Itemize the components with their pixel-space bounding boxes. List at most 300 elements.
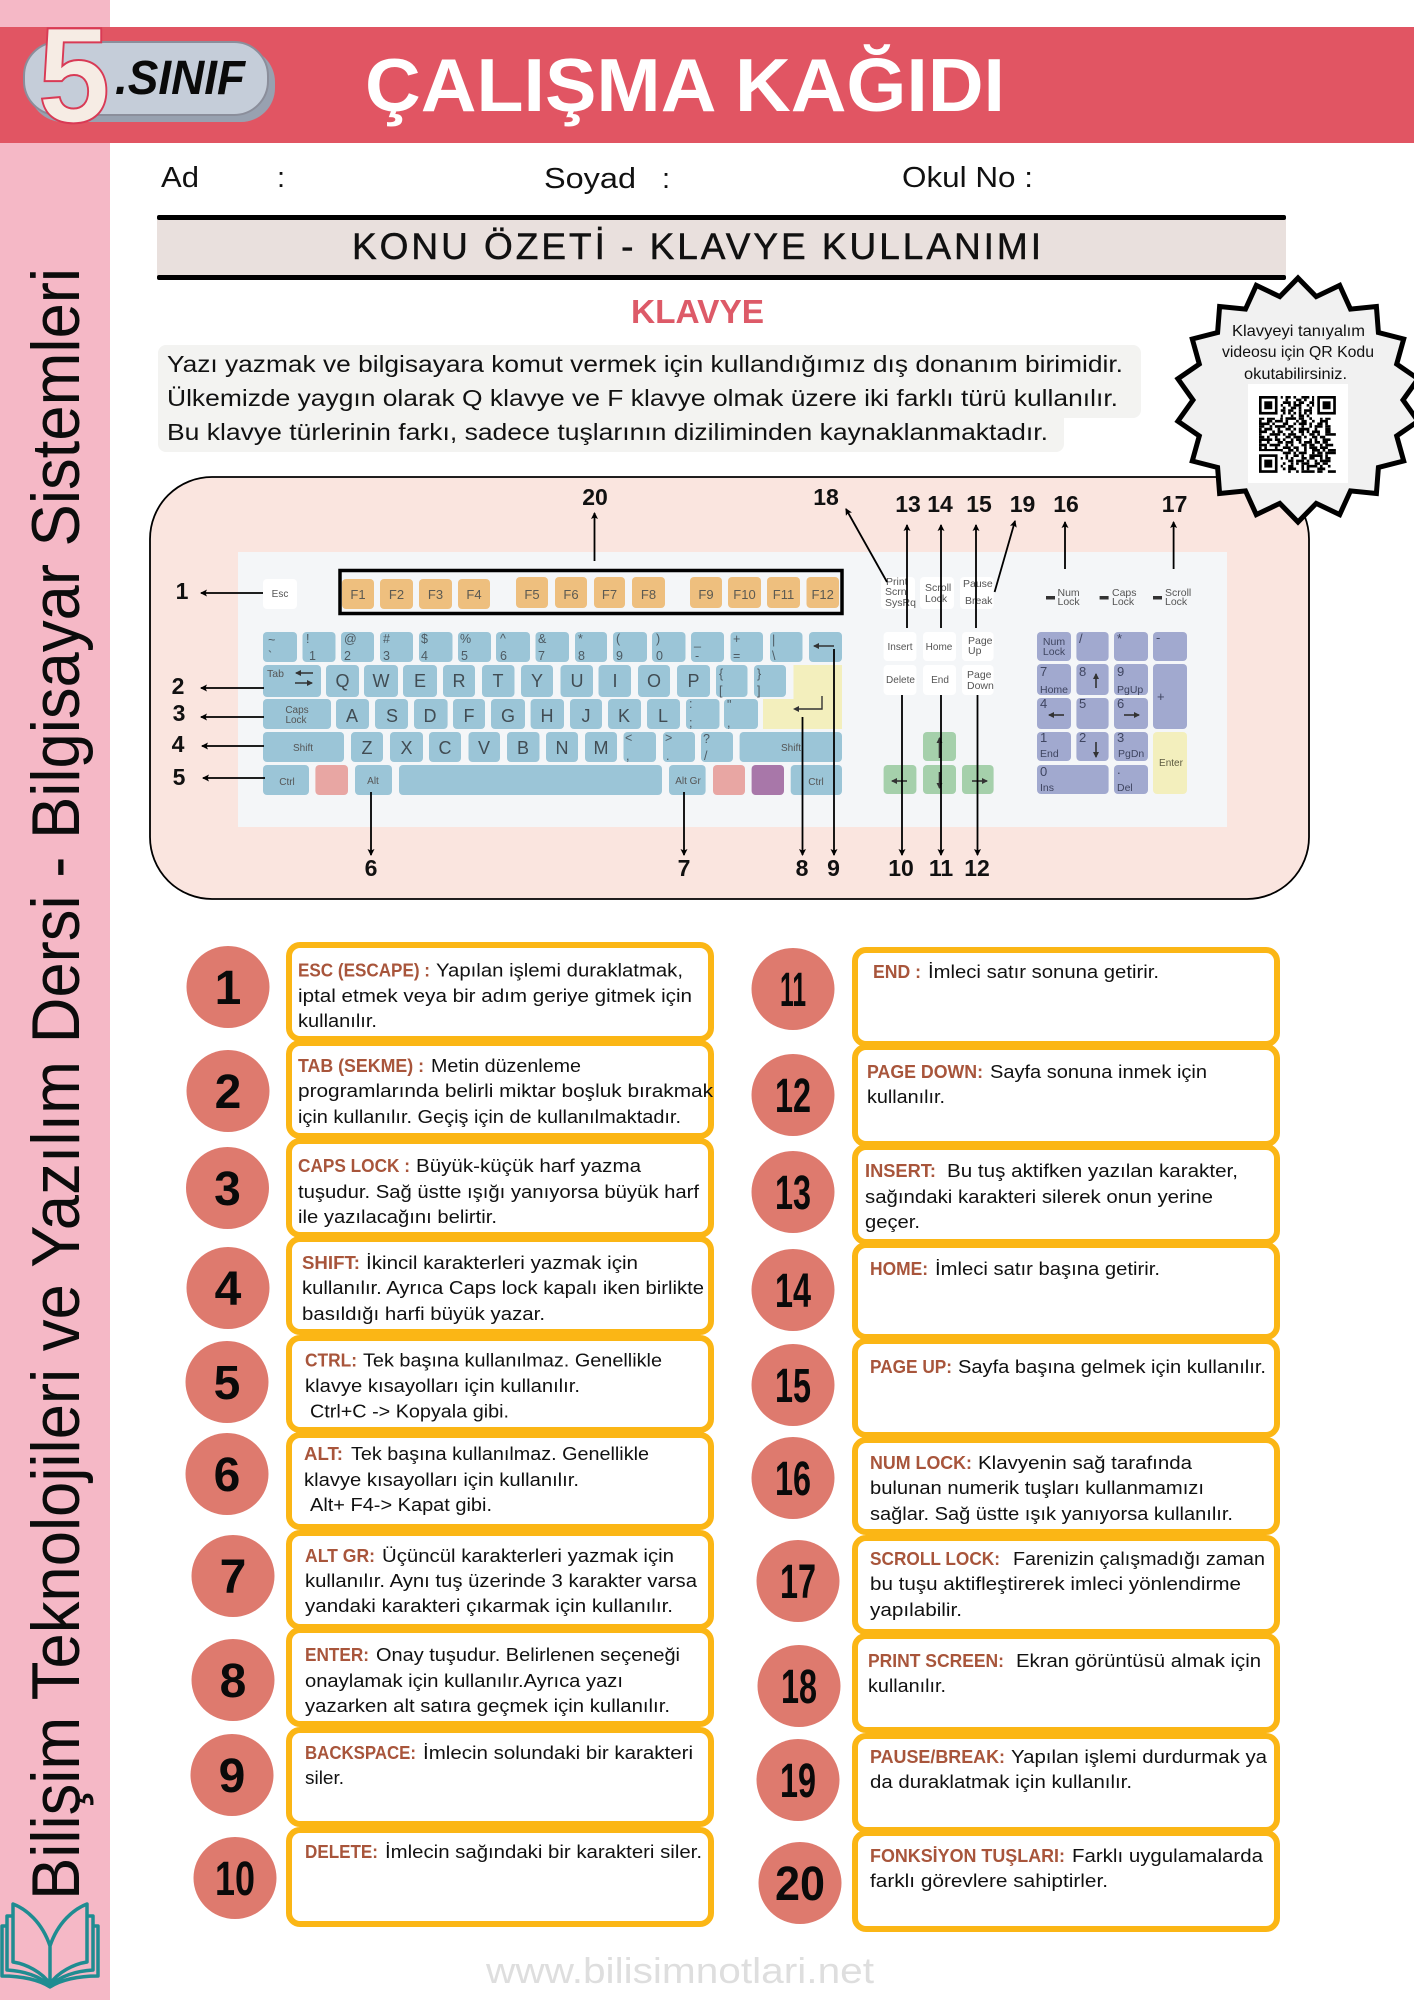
number badge 14: 14 — [775, 1265, 811, 1318]
number badge 20 — [758, 1842, 842, 1924]
number badge 6 — [186, 1433, 268, 1515]
key row: qwerty: Q — [335, 671, 350, 691]
key row: numbers: 5 — [461, 649, 468, 663]
card: insert: Bu tuş aktifken yazılan karakter, — [947, 1161, 1238, 1181]
number badge 20: 20 — [775, 1858, 825, 1911]
number badge 14 — [752, 1249, 834, 1331]
callout 19 — [995, 491, 1035, 592]
key row: qwerty: Tab — [267, 668, 284, 680]
indicator lights: Lock — [1165, 596, 1188, 608]
key row: home row: F — [464, 706, 474, 726]
navigation keys: Up — [968, 645, 982, 657]
callout 3: 3 — [173, 700, 185, 726]
callout 6: 6 — [365, 855, 377, 881]
numeric keypad: 7 — [1040, 664, 1047, 679]
card: backspace: BACKSPACE: — [305, 1743, 416, 1763]
key row: numbers: - — [695, 649, 699, 663]
callout 12: 12 — [964, 855, 990, 881]
key row: qwerty: P — [687, 671, 700, 691]
card: pause break — [855, 1736, 1277, 1830]
card: backspace: siler. — [305, 1768, 344, 1788]
key row: shift row: B — [517, 738, 529, 758]
number badge 19: 19 — [780, 1755, 816, 1808]
callout 7 — [678, 792, 690, 881]
navigation keys: Break — [965, 595, 993, 607]
badge: 5. sınıf: .SINIF — [115, 52, 247, 105]
badge: 5. sınıf: 5 — [38, 0, 110, 151]
card: esc: Yapılan işlemi duraklatmak, — [436, 960, 683, 980]
callout 5: 5 — [173, 764, 186, 790]
number badge 9 — [190, 1734, 274, 1816]
callout 9: 9 — [827, 855, 840, 881]
number badge 8 — [192, 1639, 274, 1721]
card: enter — [289, 1630, 711, 1724]
card: insert: geçer. — [865, 1212, 920, 1232]
intro paragraph: Bu klavye türlerinin farkı, sadece tuşlarının diziliminden kaynaklanmaktadır. — [167, 419, 1048, 445]
card: print screen: Ekran görüntüsü almak için — [1016, 1651, 1261, 1671]
key row: home row — [263, 697, 758, 730]
card: ctrl: klavye kısayolları için kullanılır. — [305, 1376, 580, 1396]
key row: shift row: < — [625, 731, 632, 745]
numeric keypad: 9 — [1117, 664, 1124, 679]
student info row: Soyad — [544, 163, 636, 195]
key row: numbers: ~ — [268, 633, 275, 647]
number badge 2 — [186, 1050, 270, 1132]
card: print screen: kullanılır. — [868, 1676, 946, 1696]
card: function keys: farklı görevlere sahiptirler. — [870, 1871, 1108, 1891]
numeric keypad: End — [1040, 748, 1059, 760]
card: num lock: Klavyenin sağ tarafında — [978, 1453, 1193, 1473]
card: alt: klavye kısayolları için kullanılır. — [304, 1470, 579, 1490]
key row: qwerty: W — [372, 671, 390, 691]
card: delete: İmlecin sağındaki bir karakteri siler. — [385, 1842, 702, 1862]
card: print screen — [855, 1636, 1277, 1730]
numeric keypad: 8 — [1079, 664, 1086, 679]
key row: shift row: M — [594, 738, 608, 758]
numeric keypad: 5 — [1079, 696, 1086, 711]
number badge 15: 15 — [775, 1360, 811, 1413]
card: page down — [855, 1047, 1277, 1144]
number badge 13 — [752, 1151, 834, 1233]
card: esc: kullanılır. — [298, 1011, 377, 1031]
icon: open book — [2, 1904, 98, 1987]
key row: qwerty: E — [414, 671, 426, 691]
indicator lights — [1046, 587, 1191, 608]
key row: shift row: / — [704, 749, 708, 763]
key row: qwerty: ] — [757, 684, 760, 698]
card: enter: Onay tuşudur. Belirlenen seçeneği — [376, 1645, 680, 1665]
key row: numbers: % — [460, 632, 471, 646]
number badge 18: 18 — [781, 1661, 817, 1714]
navigation keys: Page — [968, 635, 993, 647]
key row: qwerty: [ — [719, 684, 723, 698]
key row: shift row: . — [666, 749, 669, 763]
numeric keypad: / — [1079, 631, 1083, 646]
key row: bottom row: Ctrl — [808, 777, 824, 788]
callout 6 — [365, 792, 377, 881]
callout 16: 16 — [1053, 491, 1079, 517]
qr callout burst — [1178, 278, 1414, 522]
key row: home row: H — [540, 706, 554, 726]
key row: qwerty: I — [612, 671, 618, 691]
card: shift — [289, 1239, 711, 1332]
sidebar: pink strip — [0, 0, 110, 2000]
numeric keypad: Num — [1043, 636, 1065, 648]
callout 7: 7 — [678, 855, 690, 881]
topic banner: KONU ÖZETİ - KLAVYE KULLANIMI — [352, 226, 1041, 267]
card: caps lock: ile yazılacağını belirtir. — [298, 1207, 497, 1227]
key row: qwerty: } — [757, 667, 761, 681]
card: scroll lock: Farenizin çalışmadığı zaman — [1013, 1549, 1265, 1569]
key row: bottom row: Ctrl — [279, 777, 295, 788]
card: esc — [289, 945, 711, 1039]
key row: home row: J — [582, 706, 590, 726]
number badge 4 — [186, 1247, 270, 1329]
number badge 7: 7 — [220, 1551, 246, 1604]
card: shift: basıldığı harfi büyük yazar. — [302, 1304, 545, 1324]
key row: shift row: C — [438, 738, 452, 758]
numeric keypad: Enter — [1159, 758, 1184, 769]
key row: home row: ; — [689, 716, 692, 730]
card: caps lock: CAPS LOCK : — [298, 1156, 410, 1176]
title: ÇALIŞMA KAĞIDI — [365, 43, 1005, 127]
numeric keypad: + — [1157, 689, 1165, 704]
card: alt gr: yandaki karakteri çıkarmak için kullanılır. — [305, 1596, 673, 1616]
function keys group: F3 — [428, 587, 443, 602]
key row: numbers: 4 — [421, 649, 428, 663]
number badge 1: 1 — [215, 962, 241, 1015]
number badge 10 — [194, 1837, 276, 1919]
heading: klavye: KLAVYE — [631, 293, 764, 330]
card: tab: için kullanılır. Geçiş için de kullanılmaktadır. — [298, 1107, 681, 1127]
function keys group: F2 — [389, 587, 404, 602]
key: enter — [763, 665, 842, 729]
number badge 18 — [758, 1645, 840, 1727]
key row: qwerty: T — [492, 671, 504, 691]
student info row: Okul No : — [902, 162, 1033, 194]
numeric keypad: 1 — [1040, 730, 1047, 745]
card: page down: PAGE DOWN: — [867, 1062, 983, 1082]
key row: numbers: \ — [772, 649, 776, 663]
callout 8: 8 — [796, 855, 809, 881]
callout 17 — [1162, 491, 1187, 569]
card: alt gr: ALT GR: — [305, 1546, 375, 1566]
callout 19: 19 — [1010, 491, 1035, 517]
card: caps lock: tuşudur. Sağ üstte ışığı yanıyorsa büyük harf — [298, 1182, 700, 1202]
numeric keypad: Home — [1040, 684, 1068, 696]
card: scroll lock — [855, 1538, 1277, 1632]
navigation keys: Down — [967, 680, 994, 692]
card: shift: SHIFT: — [302, 1253, 360, 1273]
key row: home row: L — [658, 706, 668, 726]
navigation keys: Insert — [887, 642, 913, 653]
key row: bottom row: Alt Gr — [675, 776, 701, 787]
callout 10: 10 — [888, 855, 914, 881]
key row: numbers: + — [733, 632, 740, 646]
number badge 16 — [752, 1437, 834, 1519]
function keys group: F6 — [563, 587, 579, 602]
card: backspace: İmlecin solundaki bir karakteri — [423, 1743, 693, 1763]
card: end: İmleci satır sonuna getirir. — [928, 962, 1159, 982]
key row: numbers: ) — [656, 632, 660, 646]
card: insert: INSERT: — [865, 1161, 936, 1181]
callout 20 — [582, 484, 608, 561]
card: page down: Sayfa sonuna inmek için — [990, 1062, 1207, 1082]
key: esc — [263, 579, 297, 609]
card: pause break: Yapılan işlemi durdurmak ya — [1011, 1747, 1268, 1767]
card: alt gr — [289, 1533, 711, 1627]
number badge 9: 9 — [219, 1750, 245, 1803]
key row: home row: , — [727, 716, 730, 730]
navigation keys: Delete — [886, 675, 915, 686]
key row: shift row: Shift — [781, 743, 801, 754]
student info row: : — [662, 163, 670, 195]
card: enter: onaylamak için kullanılır.Ayrıca yazı — [305, 1671, 623, 1691]
qr callout burst: Klavyeyi tanıyalım — [1232, 323, 1365, 340]
navigation keys — [881, 576, 994, 794]
number badge 12 — [752, 1054, 834, 1136]
number badge 2: 2 — [215, 1066, 241, 1119]
key row: numbers: 7 — [538, 649, 545, 663]
function keys group: F9 — [698, 587, 714, 602]
card: home: İmleci satır başına getirir. — [935, 1259, 1160, 1279]
card: insert: sağındaki karakteri silerek onun yerine — [865, 1187, 1213, 1207]
number badge 8: 8 — [220, 1655, 246, 1708]
key row: home row: : — [689, 697, 692, 711]
key row: numbers: 8 — [578, 649, 585, 663]
key row: shift row: Z — [362, 738, 372, 758]
callout 11: 11 — [929, 855, 953, 881]
callout 13 — [895, 491, 921, 628]
key row: numbers: ` — [268, 649, 272, 663]
header band — [0, 27, 1414, 143]
card: enter: yazarken alt satıra geçmek için kullanılır. — [305, 1696, 670, 1716]
callout 1: 1 — [176, 578, 189, 604]
number badge 10: 10 — [215, 1853, 255, 1906]
key row: qwerty — [263, 665, 786, 698]
function keys group: F12 — [811, 587, 834, 602]
panel: keyboard diagram — [150, 477, 1309, 899]
card: num lock: NUM LOCK: — [870, 1453, 972, 1473]
intro paragraph: Ülkemizde yaygın olarak Q klavye ve F klavye olmak üzere iki farklı türü kullanılır. — [167, 385, 1118, 411]
card: ctrl: Tek başına kullanılmaz. Genellikle — [363, 1350, 662, 1370]
key row: numbers: 0 — [656, 649, 663, 663]
key row: numbers: | — [772, 633, 775, 647]
key row: numbers: = — [733, 649, 740, 663]
card: alt: Alt+ F4-> Kapat gibi. — [310, 1495, 492, 1515]
callout 17: 17 — [1162, 491, 1187, 517]
navigation keys: Lock — [925, 593, 948, 605]
key row: home row: K — [618, 706, 630, 726]
footer website: www.bilisimnotlari.net — [485, 1950, 874, 1991]
navigation keys: Pause — [963, 578, 993, 590]
number badge 3: 3 — [214, 1163, 241, 1216]
number badge 4: 4 — [215, 1263, 242, 1316]
navigation keys: Print — [886, 576, 908, 588]
numeric keypad: Lock — [1043, 646, 1066, 658]
key row: shift row: X — [400, 738, 413, 758]
key row: numbers: & — [538, 632, 547, 646]
key row: shift row: , — [626, 749, 629, 763]
callout 4 — [172, 731, 264, 757]
card: insert — [855, 1147, 1277, 1242]
card: home: HOME: — [870, 1259, 928, 1279]
function keys group: F11 — [773, 587, 794, 602]
navigation keys: Page — [967, 669, 992, 681]
key row: numbers: ^ — [500, 632, 506, 646]
callout 3 — [173, 700, 264, 726]
numeric keypad: PgDn — [1118, 748, 1144, 760]
card: esc: iptal etmek veya bir adım geriye gitmek için — [298, 986, 692, 1006]
key row: numbers: _ — [693, 634, 702, 648]
number badge 11: 11 — [780, 964, 806, 1017]
badge: 5. sınıf — [24, 0, 275, 151]
card: alt — [289, 1435, 711, 1527]
intro paragraph — [158, 345, 1141, 452]
number badge 16: 16 — [775, 1453, 811, 1506]
key row: numbers: 9 — [616, 649, 623, 663]
card: function keys: Farklı uygulamalarda — [1072, 1846, 1264, 1866]
indicator lights: Lock — [1112, 596, 1135, 608]
key row: qwerty: O — [647, 671, 661, 691]
card: delete — [289, 1830, 711, 1924]
student info row: Ad — [161, 162, 199, 194]
key row: qwerty: R — [452, 671, 466, 691]
key row: home row: Lock — [285, 715, 308, 726]
callout 15: 15 — [966, 491, 992, 517]
numeric keypad — [1037, 630, 1187, 794]
card: scroll lock: SCROLL LOCK: — [870, 1549, 1000, 1569]
card: page up: Sayfa başına gelmek için kullanılır. — [958, 1357, 1266, 1377]
numeric keypad: Ins — [1040, 782, 1054, 794]
card: tab: Metin düzenleme — [431, 1056, 581, 1076]
callout 2: 2 — [172, 673, 184, 699]
card: end: END : — [873, 962, 921, 982]
student info row — [161, 162, 1033, 195]
card: tab: programlarında belirli miktar boşluk bırakmak — [298, 1081, 714, 1101]
topic banner — [157, 215, 1286, 280]
key row: qwerty: { — [719, 667, 723, 681]
key row: home row: S — [386, 706, 398, 726]
key row: qwerty: U — [570, 671, 584, 691]
function keys group: F10 — [733, 587, 756, 602]
function keys group: F8 — [641, 587, 656, 602]
callout 13: 13 — [895, 491, 921, 517]
intro paragraph: Yazı yazmak ve bilgisayara komut vermek için kullandığımız dış donanım birimidir. — [167, 351, 1123, 377]
card: alt: Tek başına kullanılmaz. Genellikle — [351, 1444, 649, 1464]
card: ctrl — [289, 1338, 711, 1430]
number badge 19 — [756, 1739, 840, 1821]
numeric keypad: * — [1117, 631, 1122, 646]
card: scroll lock: yapılabilir. — [870, 1600, 962, 1620]
callout 16 — [1053, 491, 1079, 569]
callout 1 — [176, 578, 263, 604]
card: num lock: sağlar. Sağ üstte ışık yanıyorsa kullanılır. — [870, 1504, 1233, 1524]
key row: numbers: ( — [616, 632, 621, 646]
sidebar title: vertical course name: Bilişim Teknolojileri ve Yazılım Dersi - Bilgisayar Sistemleri — [18, 268, 94, 1900]
card: delete: DELETE: — [305, 1842, 378, 1862]
key row: numbers: 3 — [383, 649, 390, 663]
key row: numbers: * — [578, 632, 583, 646]
callout 5 — [173, 764, 265, 790]
key row: numbers: 1 — [309, 649, 316, 663]
key row: shift row: V — [478, 738, 490, 758]
number badge 7 — [192, 1535, 274, 1617]
number badge 17 — [756, 1540, 840, 1622]
key row: numbers: 6 — [500, 649, 507, 663]
card: enter: ENTER: — [305, 1645, 369, 1665]
numeric keypad: PgUp — [1117, 684, 1143, 696]
number badge 5: 5 — [214, 1357, 240, 1410]
number badge 1 — [186, 946, 270, 1028]
card: pause break: PAUSE/BREAK: — [870, 1747, 1005, 1767]
indicator lights: Scroll — [1165, 587, 1191, 599]
number badge 5 — [186, 1341, 268, 1423]
card: page up: PAGE UP: — [870, 1357, 952, 1377]
function keys group — [340, 570, 842, 614]
key row: home row: A — [346, 706, 358, 726]
card: ctrl: CTRL: — [305, 1350, 357, 1370]
numeric keypad: 2 — [1079, 730, 1086, 745]
key row: shift row: ? — [703, 732, 710, 746]
card: alt gr: Üçüncül karakterleri yazmak için — [382, 1546, 674, 1566]
function keys group: F4 — [466, 587, 482, 602]
function keys group: F5 — [524, 587, 540, 602]
numeric keypad: . — [1117, 762, 1121, 777]
card: page down: kullanılır. — [867, 1087, 945, 1107]
key row: qwerty: Y — [531, 671, 543, 691]
key row: shift row — [263, 731, 842, 763]
callout 20: 20 — [582, 484, 608, 510]
card: num lock — [855, 1440, 1277, 1532]
number badge 13: 13 — [775, 1167, 811, 1220]
callout 14 — [927, 491, 953, 628]
callout 18 — [813, 484, 887, 582]
card: function keys: FONKSİYON TUŞLARI: — [870, 1846, 1065, 1866]
card: pause break: da duraklatmak için kullanılır. — [870, 1772, 1132, 1792]
numeric keypad: 0 — [1040, 764, 1047, 779]
key row: numbers: 2 — [344, 649, 351, 663]
numeric keypad: 3 — [1117, 730, 1124, 745]
qr callout burst: videosu için QR Kodu — [1222, 344, 1374, 361]
card: caps lock: Büyük-küçük harf yazma — [416, 1156, 642, 1176]
student info row: : — [277, 162, 285, 194]
card: esc: ESC (ESCAPE) : — [298, 960, 430, 980]
key row: shift row: Shift — [293, 743, 313, 754]
number badge 3 — [186, 1147, 269, 1229]
number badge 6: 6 — [214, 1449, 240, 1502]
callout 15 — [966, 491, 992, 628]
card: ctrl: Ctrl+C -> Kopyala gibi. — [310, 1402, 509, 1422]
callout 18: 18 — [813, 484, 839, 510]
indicator lights: Num — [1058, 587, 1080, 599]
number badge 12: 12 — [775, 1070, 811, 1123]
card: num lock: bulunan numerik tuşları kullanmamızı — [870, 1478, 1204, 1498]
card: alt gr: kullanılır. Aynı tuş üzerinde 3 karakter varsa — [305, 1571, 698, 1591]
indicator lights: Lock — [1058, 596, 1080, 608]
numeric keypad: 4 — [1040, 696, 1047, 711]
number badge 11 — [752, 948, 834, 1030]
indicator lights: Caps — [1112, 587, 1137, 599]
card: tab: TAB (SEKME) : — [298, 1056, 424, 1076]
navigation keys: Scroll — [925, 582, 951, 594]
callout 2 — [172, 673, 264, 699]
key row: numbers: @ — [344, 632, 357, 646]
card: function keys — [855, 1833, 1277, 1929]
key row: bottom row — [263, 765, 842, 795]
navigation keys: Home — [926, 642, 953, 653]
number badge 15 — [752, 1344, 834, 1426]
